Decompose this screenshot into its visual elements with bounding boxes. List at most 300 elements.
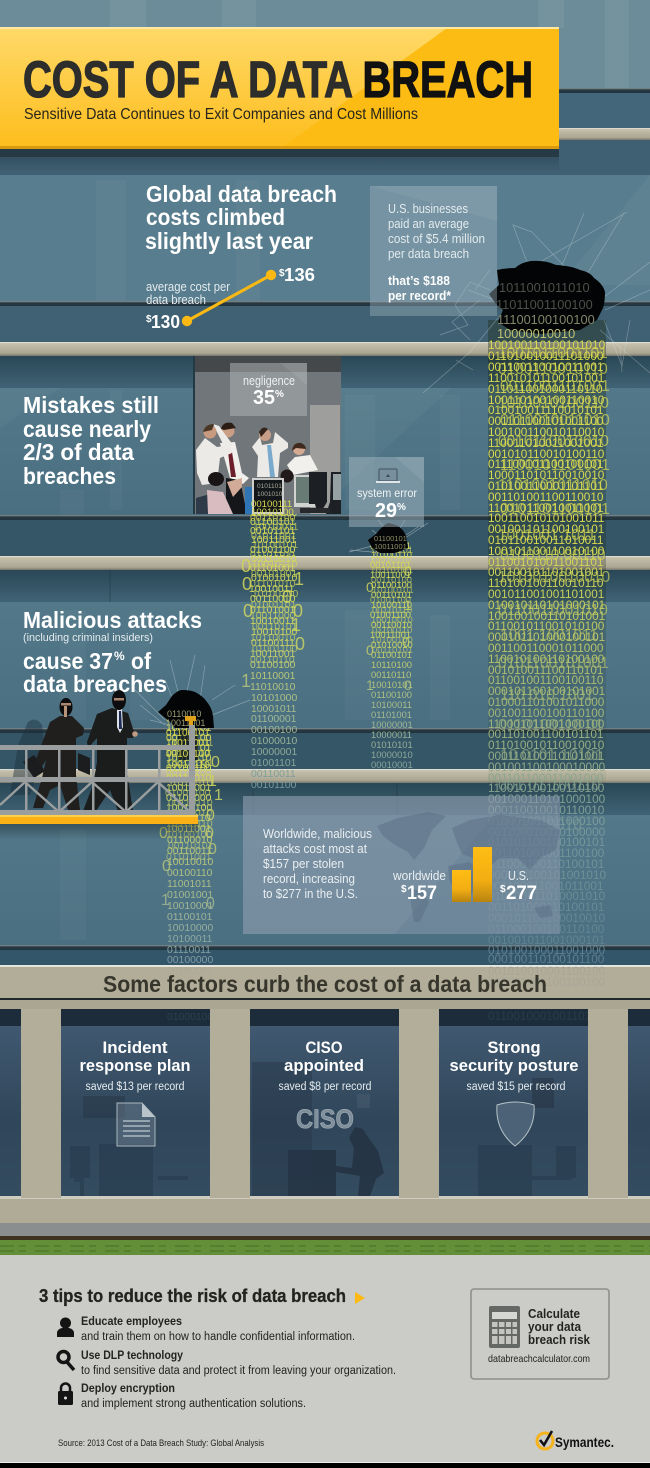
hole: attackers: 10011001 xyxy=(166,738,210,749)
data stream: large stream from main hole: 001100101101001001 xyxy=(488,565,604,579)
data stream: system error: 00101101 xyxy=(372,544,413,555)
data stream: malicious attacks: 00100000 xyxy=(167,966,213,977)
chart label: average cost per xyxy=(146,280,230,294)
tip: educate: Educate employees xyxy=(81,1314,182,1328)
data stream: negligence: 01000010 xyxy=(251,736,297,747)
panel: strong security posture xyxy=(450,1038,578,1196)
data stream: large stream from main hole: 000110100110101001 xyxy=(488,749,604,763)
callout: negligence 35%: 35 xyxy=(253,387,275,409)
small hole: system error: 10011001 xyxy=(374,542,407,551)
data stream: negligence: 1 xyxy=(241,671,251,691)
data stream: negligence: 10110001 xyxy=(250,671,296,682)
data stream: negligence: 10000001 xyxy=(251,747,297,758)
data stream: malicious attacks: 00110010 xyxy=(166,773,212,784)
data stream: overlay of larger digits: 0010110010010 xyxy=(498,433,609,450)
data stream: system error: 01101001 xyxy=(371,709,412,720)
Symantec logo: Symantec. xyxy=(555,1435,614,1450)
tip: encryption: and implement strong authentication solutions. xyxy=(81,1398,306,1410)
data stream: malicious attacks: 01101001 xyxy=(168,758,214,769)
world map xyxy=(377,812,560,922)
data stream: overlay of larger digits: 1010010100110 xyxy=(498,395,609,412)
monitors: 0101101 xyxy=(257,483,282,490)
data stream: system error: 10010101 xyxy=(371,679,413,690)
subtitle: Sensitive Data Continues to Exit Companies and Cost Millions xyxy=(24,106,418,123)
data stream: overlay of larger digits: 1001001 1011 xyxy=(498,527,596,544)
heading xyxy=(145,181,337,254)
stream in photo: 10010100 xyxy=(251,507,294,518)
arrow xyxy=(355,1292,365,1304)
data stream: large stream from main hole: 011011001000110110 xyxy=(488,382,603,396)
data stream: overlay of larger digits: 1001011001101 xyxy=(498,345,608,362)
office silhouette xyxy=(478,1145,576,1196)
data stream: system error: 01100110 xyxy=(372,624,412,635)
calculator callout: your data xyxy=(528,1319,582,1334)
data stream: overlay of larger digits: 1010010010010 xyxy=(498,569,610,586)
data stream: large stream from main hole: 110010110010011001 xyxy=(488,501,603,515)
data stream: negligence: 10010100 xyxy=(251,508,297,519)
data stream: malicious attacks: 10011001 xyxy=(166,783,212,794)
woman at right xyxy=(287,455,318,475)
text: attacks cost most at xyxy=(263,842,367,856)
heading: tips: 3 tips to reduce the risk of data breach xyxy=(39,1286,346,1306)
office silhouette xyxy=(70,1144,188,1196)
data stream: system error: 01010101 xyxy=(371,739,413,750)
data stream: large stream from main hole: 110011010011001001 xyxy=(488,436,603,450)
data stream: large stream from main hole: 000100100101001010 xyxy=(488,868,607,882)
data stream: negligence: 01001100 xyxy=(252,644,298,655)
heading: mistakes: breaches xyxy=(23,463,116,489)
icon: calculator xyxy=(489,1306,520,1348)
icon: lock xyxy=(58,1384,73,1405)
data stream: overlay of larger digits: 01001 0010 xyxy=(500,817,582,834)
data stream: system error: 10100110 xyxy=(371,549,412,560)
heading: malicious attacks: cause 37 xyxy=(23,648,113,674)
data stream: negligence: 01100001 xyxy=(251,714,297,725)
heading: slightly last year xyxy=(145,228,313,254)
data stream: negligence: 10001011 xyxy=(251,704,297,715)
data stream: negligence: 01100111 xyxy=(251,638,295,649)
bar chart: 157 xyxy=(407,883,437,904)
data stream: large stream from main hole: 011000100110100101 xyxy=(488,857,604,871)
data stream: malicious attacks: 01101001 xyxy=(166,852,212,863)
data stream: malicious attacks: 01110011 xyxy=(167,945,211,956)
callout: U.S. businesses: paid an average xyxy=(388,217,469,231)
icon: shield xyxy=(497,1102,534,1146)
data stream: malicious attacks: 10011001 xyxy=(166,824,212,835)
data stream: negligence: 00100100 xyxy=(251,725,297,736)
data stream: overlay of larger digits: 0100110010110 xyxy=(498,361,608,378)
data stream: negligence: 00100111 xyxy=(250,499,295,510)
data stream: overlay of larger digits: 0110010011010 xyxy=(500,412,610,429)
line chart xyxy=(146,265,315,332)
data stream: malicious attacks: 00110100 xyxy=(166,768,212,779)
data stream: system error: 10011001 xyxy=(370,629,411,640)
data stream: negligence: 00110010 xyxy=(251,554,297,565)
data stream: system error: 00101101 xyxy=(370,559,411,570)
data stream: system error: 0 xyxy=(366,579,374,595)
data stream: large stream from main hole: 010001001100100100 xyxy=(488,975,606,989)
data stream: negligence: 01101100 xyxy=(250,550,295,561)
data stream: overlay of larger digits: 0011001101001 xyxy=(500,378,610,395)
monitors: 1001010 xyxy=(257,491,283,498)
data stream: large stream from main hole: 001101000110100101 xyxy=(488,900,604,914)
data stream: malicious attacks: 01101000 xyxy=(166,793,212,804)
data stream: malicious attacks: 0 xyxy=(162,858,171,875)
text: CISO xyxy=(306,1038,342,1057)
data stream: large stream from main hole: 010110010011010011 xyxy=(488,533,603,547)
bar chart: U.S. xyxy=(508,869,529,883)
data stream: negligence: 10010110 xyxy=(252,559,298,570)
heading: factors: Some factors curb the cost of a data breach xyxy=(103,971,547,997)
bar chart: worldwide xyxy=(392,869,446,883)
data stream: overlay of larger digits xyxy=(498,345,610,834)
data stream: large stream from main hole: 001001100100110100 xyxy=(488,706,605,720)
data stream: large stream from main hole: 001001011001000101 xyxy=(488,933,605,947)
tip: encryption: Deploy encryption xyxy=(81,1381,175,1395)
bar chart: 277 xyxy=(506,883,537,904)
data stream: large stream from main hole: 001010010001100100 xyxy=(488,964,606,978)
data stream: negligence: 01001101 xyxy=(251,758,297,769)
section: global costs xyxy=(145,181,337,332)
data stream: large stream from main hole: 001101001100110010 xyxy=(488,490,604,504)
data stream: system error: 01101001 xyxy=(372,564,413,575)
data stream: negligence: 10011001 xyxy=(250,649,296,660)
data stream: system error xyxy=(366,540,414,770)
man with blue tie xyxy=(252,432,288,477)
data stream: system error: 10100100 xyxy=(371,634,413,645)
data stream: negligence: 10010100 xyxy=(251,627,297,638)
bar chart xyxy=(392,847,537,904)
heading: costs climbed xyxy=(146,204,285,230)
data stream: large stream from main hole: 001000110101000100 xyxy=(488,792,606,806)
icon: person xyxy=(57,1318,74,1337)
data stream: large stream from main hole: 100101100110010100 xyxy=(488,544,605,558)
data stream: malicious attacks: 00110110 xyxy=(168,798,213,809)
data stream: negligence: 10011001 xyxy=(251,535,297,546)
data stream: system error: 10010010 xyxy=(371,614,413,625)
columns xyxy=(21,1009,628,1198)
data stream: large stream from main hole: 011000100100110100 xyxy=(488,922,605,936)
hole: attackers: 01100101 xyxy=(166,728,210,739)
callout: negligence 35%: negligence xyxy=(243,374,295,388)
data stream: negligence: 0 xyxy=(282,587,292,607)
data stream: negligence: 01001010 xyxy=(251,573,297,584)
text: Strong xyxy=(488,1038,540,1057)
data stream: negligence: 01101010 xyxy=(250,579,296,590)
data stream: system error: 00010001 xyxy=(371,759,413,770)
data stream: system error: 00110100 xyxy=(371,574,412,585)
data stream: large stream from main hole: 011001001100100110 xyxy=(488,673,604,687)
data stream: large stream from main hole: 001100110010011001 xyxy=(488,360,603,374)
data stream: large stream from main hole: 000101100100010010 xyxy=(488,911,606,925)
icon: laptop xyxy=(376,469,400,483)
line chart: 130 xyxy=(151,312,180,332)
panel: strong security posture: security posture xyxy=(450,1056,578,1075)
line chart: $ xyxy=(279,268,285,279)
data stream: large stream from main hole xyxy=(488,338,607,1023)
data stream: negligence: 0 xyxy=(241,556,251,576)
data stream: large stream from main hole: 100100100110101001 xyxy=(488,609,605,623)
bar chart: $ xyxy=(500,884,506,895)
data stream: large stream from main hole: 011010010110010010 xyxy=(488,738,605,752)
data stream: negligence xyxy=(241,499,305,791)
data stream: negligence: 10110010 xyxy=(250,633,296,644)
data stream: negligence: 01100100 xyxy=(250,660,296,671)
office silhouette xyxy=(288,1127,384,1196)
data stream: system error: 0 xyxy=(402,634,410,650)
data stream: negligence: 00101001 xyxy=(251,569,297,580)
man with red tie xyxy=(220,442,249,484)
rails xyxy=(0,88,650,93)
data stream: large stream from main hole: 001100110001011000 xyxy=(488,641,604,655)
data stream: large stream from main hole: 011010010011101000 xyxy=(488,349,604,363)
chart label: data breach xyxy=(146,293,206,307)
callout: system error 29%: 29 xyxy=(375,500,397,522)
main breach hole with cracks: 11100100100100 xyxy=(497,312,595,327)
data stream: malicious attacks: 1 xyxy=(208,773,217,790)
data stream: large stream from main hole: 000110010010110010 xyxy=(488,803,605,817)
heading: malicious attacks: of xyxy=(131,648,151,674)
bar chart: $ xyxy=(401,884,407,895)
data stream: large stream from main hole: 001101100101001100 xyxy=(488,414,604,428)
data stream: system error: 10110100 xyxy=(371,659,412,670)
heading: mistakes: 2/3 of data xyxy=(23,439,134,465)
data stream: malicious attacks: 01100110 xyxy=(168,819,213,830)
callout: worldwide malicious attacks xyxy=(243,796,560,934)
tip: educate xyxy=(81,1314,355,1343)
data stream: large stream from main hole: 110010101100101001 xyxy=(488,371,604,385)
data stream: negligence: 0 xyxy=(242,574,252,594)
data stream: negligence: 01101001 xyxy=(250,605,296,616)
data stream: malicious attacks: 10010100 xyxy=(166,803,212,814)
heading: malicious attacks: data breaches xyxy=(23,671,167,697)
heading: malicious attacks: % xyxy=(114,649,125,663)
text xyxy=(80,1038,190,1093)
callout: U.S. businesses: per data breach xyxy=(388,247,469,261)
data stream: negligence: 0 xyxy=(243,601,253,621)
data stream: large stream from main hole: 110010100100110100 xyxy=(488,781,605,795)
data stream: overlay of larger digits: 1100101101001 xyxy=(500,457,610,474)
icon: magnifier xyxy=(58,1352,74,1370)
data stream: large stream from main hole: 100110010101001011 xyxy=(488,511,604,525)
data stream: overlay of larger digits: 110 010 1001 xyxy=(500,687,594,704)
data stream: large stream from main hole: 011001010011001101 xyxy=(488,555,603,569)
data stream: large stream from main hole: 001101001100101101 xyxy=(488,727,603,741)
data stream: malicious attacks: 10100100 xyxy=(166,830,212,841)
data stream: system error: 0 xyxy=(404,677,412,693)
data stream: system error: 01001100 xyxy=(370,594,411,605)
data stream: large stream from main hole: 010010011110010101 xyxy=(488,403,603,417)
data stream: large stream from main hole: 000101101000100101 xyxy=(488,630,605,644)
tips panel xyxy=(0,1255,650,1468)
data stream: malicious attacks: 10010010 xyxy=(166,808,212,819)
data stream: negligence: 0 xyxy=(295,634,305,654)
data stream: system error: 10000001 xyxy=(371,719,413,730)
tip: DLP xyxy=(81,1348,396,1377)
man holding head xyxy=(196,438,232,485)
data stream: malicious attacks: 10100101 xyxy=(168,778,214,789)
data stream: large stream from main hole: 110100100110010110 xyxy=(488,576,604,590)
line chart: 136 xyxy=(284,265,315,285)
stream in photo: 00100111 xyxy=(251,499,292,510)
data stream: malicious attacks: 01001001 xyxy=(167,890,213,901)
burglar right xyxy=(78,690,138,811)
panel: strong security posture: saved $15 per record xyxy=(466,1081,566,1093)
data stream: negligence: 1 xyxy=(294,569,304,589)
callout: system error 29%: % xyxy=(397,502,406,513)
people xyxy=(196,423,318,514)
data stream: system error: 10100011 xyxy=(371,699,412,710)
storefront facade xyxy=(0,965,650,1255)
data stream: large stream from main hole: 010001001011000100 xyxy=(488,814,606,828)
data stream: system error: 10100110 xyxy=(371,599,412,610)
calculator callout: Calculate xyxy=(528,1306,580,1321)
callout: U.S. businesses: that’s $188 xyxy=(388,274,450,288)
small hole: system error xyxy=(349,520,428,560)
text xyxy=(263,827,372,901)
data stream: negligence: 01101001 xyxy=(250,563,296,574)
data stream: large stream from main hole: 001010110010100110 xyxy=(488,447,605,461)
data stream: overlay of larger digits: 10 0101 10101 xyxy=(500,747,603,764)
main breach hole with cracks xyxy=(423,212,650,393)
tip: encryption xyxy=(81,1381,306,1410)
data stream: overlay of larger digits: 0110011001010 xyxy=(498,602,608,619)
data stream: large stream from main hole: 010100100011001000 xyxy=(488,943,606,957)
hole: attackers: 10010110 xyxy=(166,760,210,771)
attackers on platform xyxy=(0,690,198,840)
data stream: negligence: 00110100 xyxy=(250,513,296,524)
data stream: malicious attacks: 0 xyxy=(159,825,168,842)
data stream: malicious attacks: 10010110 xyxy=(166,753,212,764)
data stream: malicious attacks: 0 xyxy=(205,825,214,842)
data stream: malicious attacks: 0 xyxy=(206,807,215,824)
data stream: system error: 10010110 xyxy=(370,554,411,565)
data stream: system error: 1 xyxy=(404,597,412,613)
panel: incident response plan xyxy=(70,1038,190,1196)
callout: U.S. businesses: per record* xyxy=(388,289,451,303)
icon: CISO mark: CISO xyxy=(296,1104,354,1134)
data stream: large stream from main hole: 110001011001000100 xyxy=(488,717,605,731)
data stream: negligence: 10010011 xyxy=(250,616,296,627)
data stream: overlay of larger digits: 0101100101001 xyxy=(498,655,609,672)
data stream: malicious attacks: 0 xyxy=(211,754,220,771)
data stream: system error: 01100101 xyxy=(371,649,412,660)
data stream: negligence: 01001101 xyxy=(251,600,297,611)
data stream: large stream from main hole: 100110100100110010 xyxy=(488,393,605,407)
data stream: overlay of larger digits: 1001 1001011 xyxy=(500,627,598,644)
text: Incident xyxy=(102,1038,168,1057)
data stream: overlay of larger digits: 1101001011010 xyxy=(498,477,608,494)
data stream: malicious attacks xyxy=(159,714,223,1023)
data stream: malicious attacks: 10100011 xyxy=(167,934,213,945)
data stream: large stream from main hole: 110010100110100100 xyxy=(488,652,605,666)
chart label xyxy=(146,280,230,307)
data stream: large stream from main hole: 000100110100101100 xyxy=(488,952,605,966)
data stream: malicious attacks: 01100010 xyxy=(167,835,213,846)
data stream: large stream from main hole: 001011001001101001 xyxy=(488,587,604,601)
hole: attackers xyxy=(135,655,250,771)
data stream: negligence: 10100100 xyxy=(252,589,298,600)
data stream: negligence: 01011001 xyxy=(251,531,297,542)
data stream: large stream from main hole: 001001101100100101 xyxy=(488,522,604,536)
data stream: negligence: 00101100 xyxy=(251,780,297,791)
data stream: negligence: 10010011 xyxy=(249,584,295,595)
data stream: large stream from main hole: 010100011010001010 xyxy=(488,889,606,903)
data stream: large stream from main hole: 001010011100110101 xyxy=(488,663,603,677)
data stream: malicious attacks: 00101101 xyxy=(168,738,214,749)
text: Worldwide, malicious xyxy=(263,827,372,841)
data stream: system error: 0 xyxy=(366,642,374,658)
line chart: $ xyxy=(146,314,152,325)
banner xyxy=(0,27,559,173)
data stream: large stream from main hole: 001100010010100000 xyxy=(488,825,606,839)
data stream: malicious attacks: 00110101 xyxy=(168,841,214,852)
data stream: malicious attacks: 00100000 xyxy=(167,955,213,966)
callout: system error 29%: system error xyxy=(357,486,417,500)
main breach hole with cracks: 10000010010 xyxy=(497,326,575,341)
data stream: negligence: 11010010 xyxy=(250,682,296,693)
heading: mistakes xyxy=(23,392,159,489)
data stream: malicious attacks: 1 xyxy=(161,892,170,909)
data stream: large stream from main hole: 010100110001101101 xyxy=(488,479,603,493)
main breach hole with cracks: 11011001100100 xyxy=(496,297,593,312)
calculator callout xyxy=(471,1289,609,1379)
data stream: overlay of larger digits: 0110100110 01 xyxy=(498,717,603,734)
panel: CISO appointed: appointed xyxy=(284,1056,364,1075)
data stream: malicious attacks: 00100110 xyxy=(167,868,213,879)
calculator callout: databreachcalculator.com xyxy=(488,1353,590,1365)
data stream: large stream from main hole: 010001101001011000 xyxy=(488,695,605,709)
text: record, increasing xyxy=(263,872,355,886)
wall shadow xyxy=(10,720,45,795)
hole: attackers: 00101100 xyxy=(166,749,210,760)
calculator callout: breach risk xyxy=(528,1332,591,1347)
data stream: malicious attacks: 01000100 xyxy=(167,1012,213,1023)
heading: malicious attacks xyxy=(23,607,202,697)
data stream: negligence: 10101000 xyxy=(251,693,297,704)
data stream: negligence: 01100101 xyxy=(250,517,296,528)
heading: malicious attacks: Malicious attacks xyxy=(23,607,202,633)
data stream: system error: 01100100 xyxy=(371,579,412,590)
data stream: malicious attacks: 01100101 xyxy=(166,714,212,725)
source note: Source: 2013 Cost of a Data Breach Study: Global Analysis xyxy=(58,1438,264,1449)
data stream: malicious attacks: 00110011 xyxy=(167,846,212,857)
data stream: negligence: 01101001 xyxy=(252,504,298,515)
data stream: system error: 01100100 xyxy=(371,689,412,700)
Symantec logo xyxy=(537,1431,614,1450)
data stream: large stream from main hole: 011001000100110100 xyxy=(488,1009,605,1023)
heading: mistakes: Mistakes still xyxy=(23,392,159,418)
text: response plan xyxy=(80,1056,190,1075)
office photo: negligence xyxy=(193,356,341,518)
platform railing xyxy=(0,725,195,815)
data stream: malicious attacks: 01100110 xyxy=(166,813,211,824)
data stream: system error: 01100101 xyxy=(370,540,411,551)
data stream: system error: 00110010 xyxy=(371,619,412,630)
seated woman xyxy=(196,494,210,514)
monitors xyxy=(252,472,341,514)
data stream: malicious attacks: 10010000 xyxy=(167,923,213,934)
shading behind big stream xyxy=(488,320,606,820)
main breach hole with cracks: 1011001011010 xyxy=(499,280,590,295)
burglar left xyxy=(23,698,84,810)
tip: DLP: Use DLP technology xyxy=(81,1348,183,1362)
small hole: system error: 01100101 xyxy=(374,534,407,543)
data stream: negligence: 10010011 xyxy=(253,522,299,533)
data stream: malicious attacks: 0 xyxy=(208,841,217,858)
heading: mistakes: cause nearly xyxy=(23,416,151,442)
data stream: malicious attacks: 11001011 xyxy=(167,879,212,890)
